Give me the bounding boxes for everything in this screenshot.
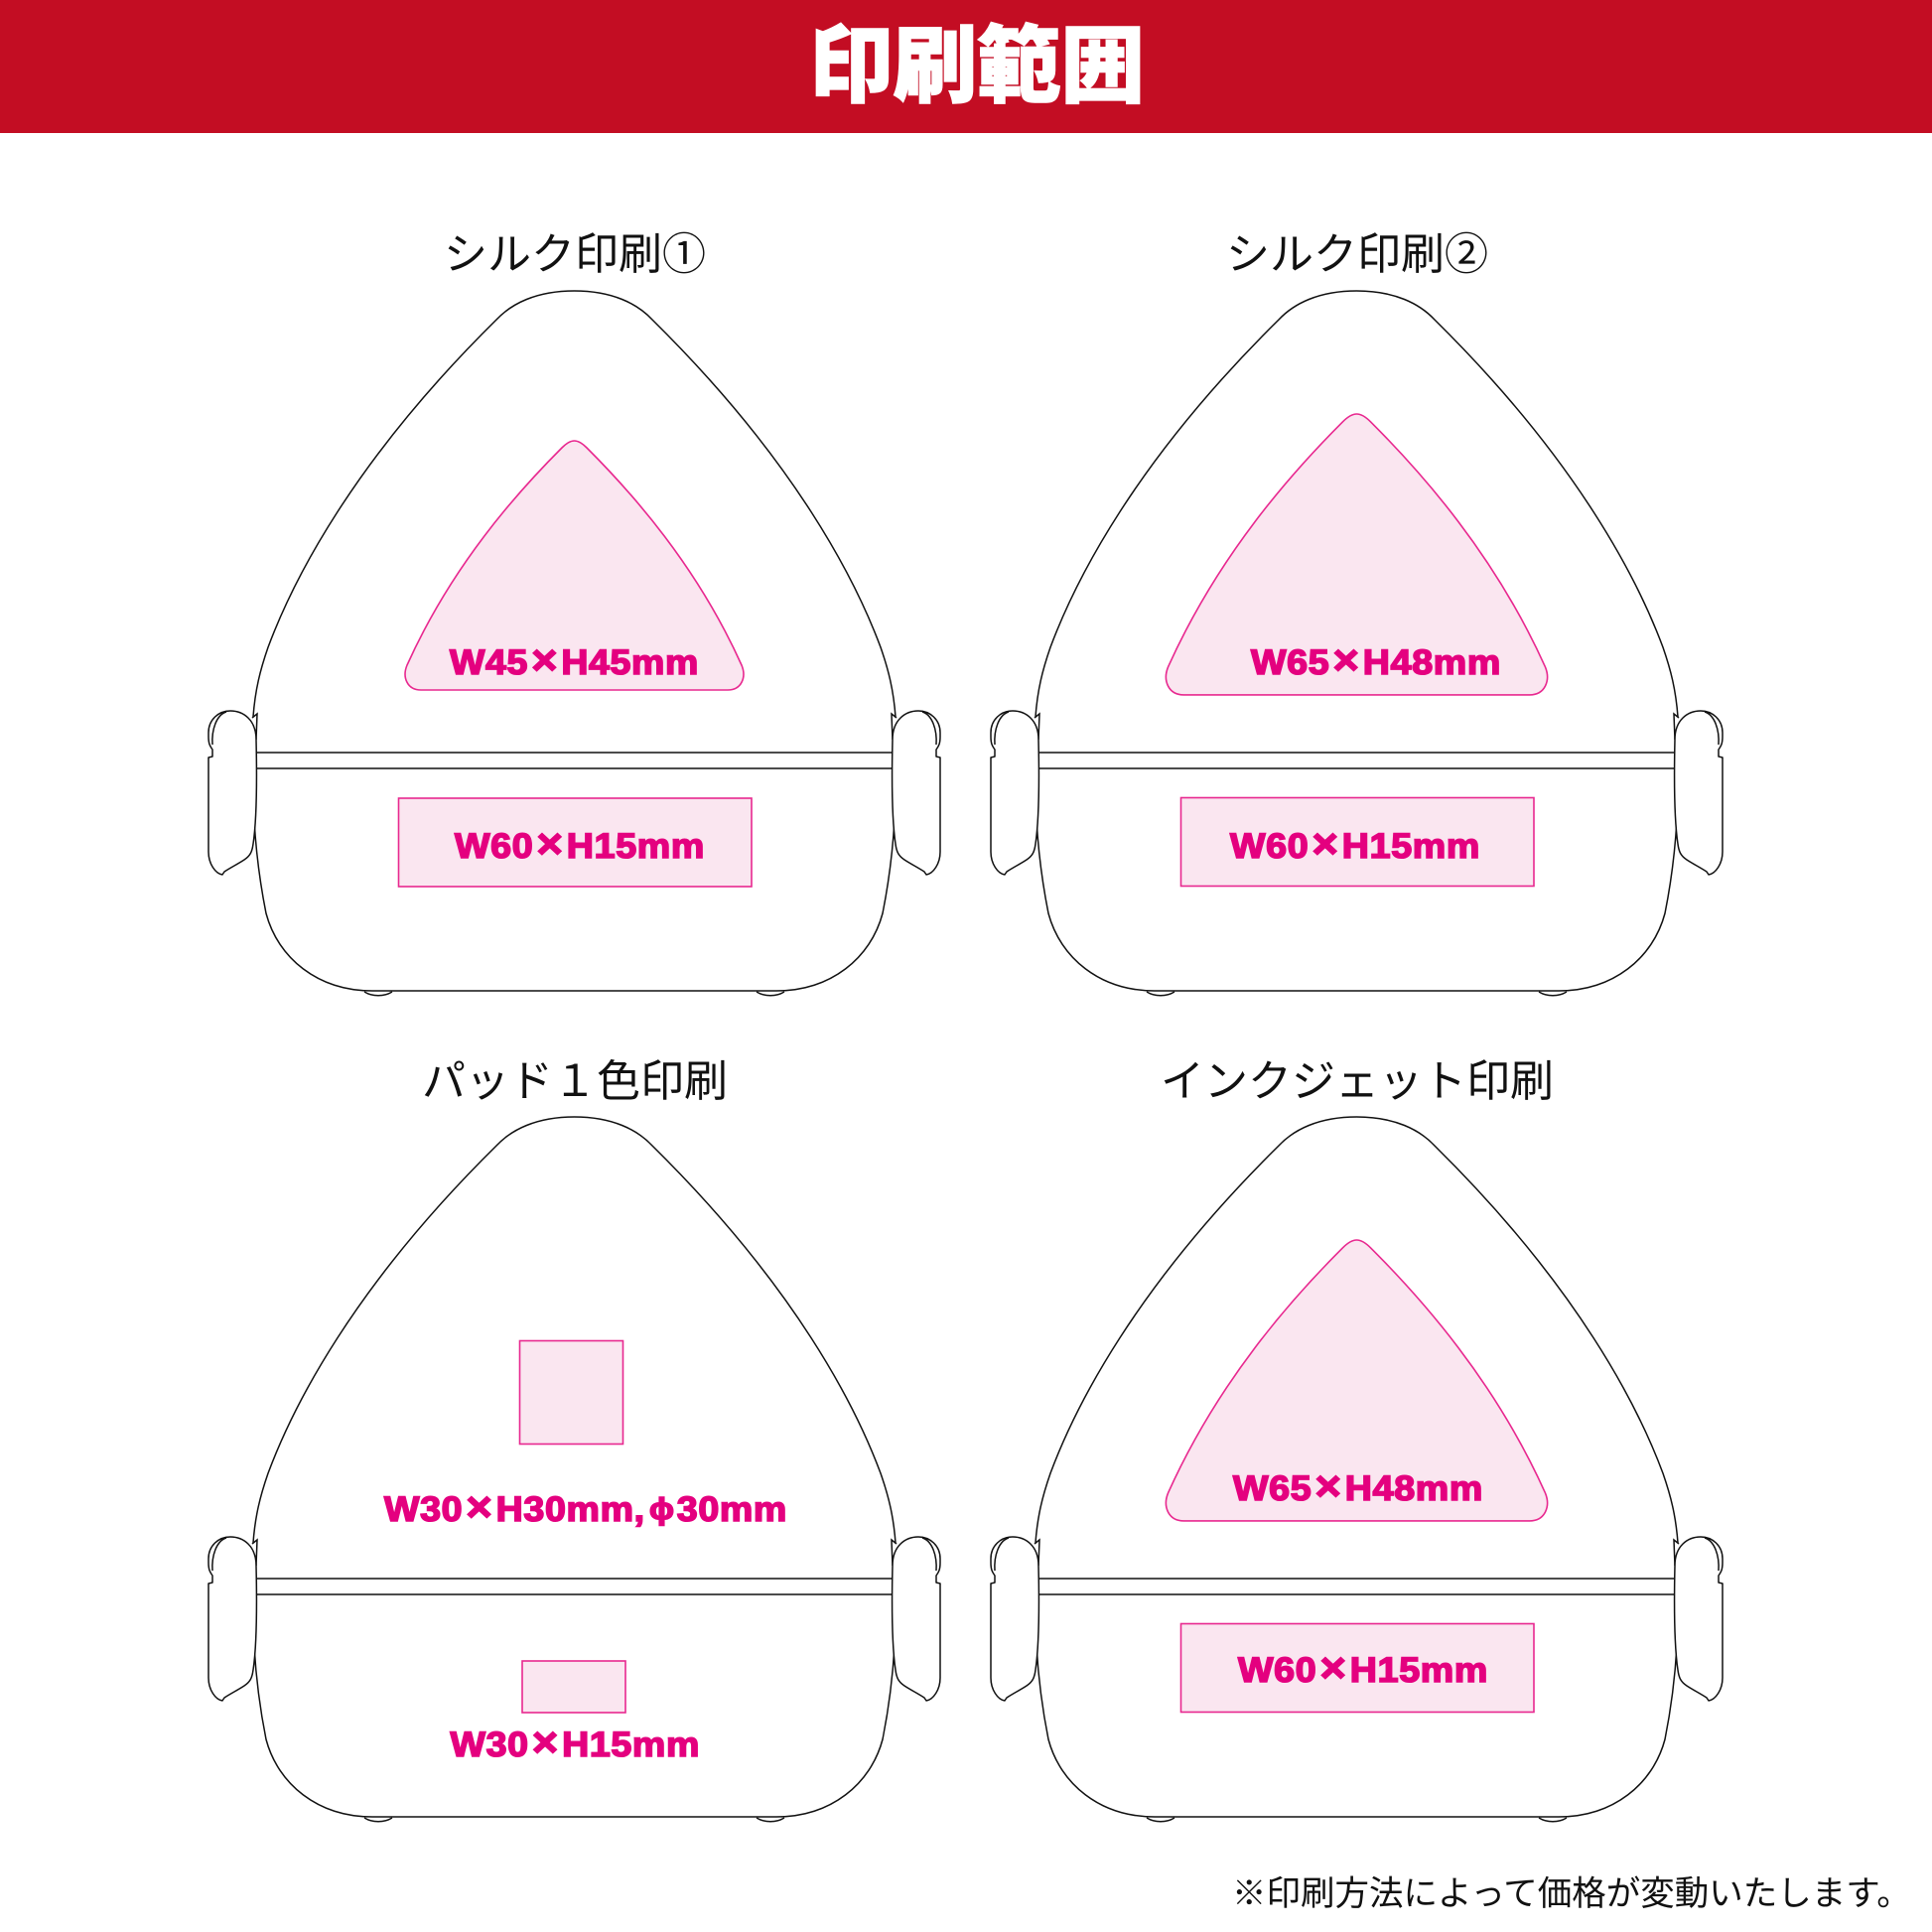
- panel: inkjet print: [991, 1057, 1723, 1822]
- dimension label: 30mm: [677, 1490, 787, 1529]
- dimension label: W65×H48mm: [1233, 1462, 1483, 1509]
- product outline: [208, 291, 940, 996]
- print area: triangle: [1166, 1240, 1548, 1521]
- print area: band rectangle: [1181, 798, 1534, 886]
- heading: pad print: パッド１色印刷: [422, 1057, 728, 1106]
- heading: inkjet print: インクジェット印刷: [1161, 1057, 1554, 1106]
- product outline: [991, 291, 1723, 996]
- panel: pad print 1 colour: [208, 1057, 940, 1822]
- product outline: [991, 1117, 1723, 1822]
- dimension label: W65×H48mm: [1251, 636, 1501, 683]
- print area: band rectangle: [1181, 1624, 1534, 1712]
- dimension label: ϕ: [649, 1491, 675, 1526]
- print area: triangle: [1166, 414, 1548, 695]
- print area: band rectangle: [522, 1661, 625, 1713]
- print area: triangle: [405, 441, 744, 690]
- print area: square: [520, 1340, 623, 1444]
- dimension label: W60×H15mm: [1238, 1644, 1488, 1691]
- dimension label: W30×H30mm,: [384, 1483, 634, 1530]
- panel: silk print 2: [991, 230, 1723, 996]
- heading: silk print 2: シルク印刷②: [1226, 230, 1488, 279]
- header band: [0, 0, 1932, 133]
- heading: silk print 1: シルク印刷①: [444, 230, 706, 279]
- footnote: ※印刷方法によって価格が変動いたします。: [1232, 1875, 1911, 1913]
- panel: silk print 1: [208, 230, 940, 996]
- dimension label: W45×H45mm: [450, 636, 699, 683]
- dimension label: W60×H15mm: [455, 820, 705, 867]
- dimension label: W30×H15mm: [451, 1719, 700, 1765]
- title: 印刷範囲: [809, 20, 1145, 113]
- dimension label: W60×H15mm: [1230, 820, 1480, 867]
- product outline: [208, 1117, 940, 1822]
- print area: band rectangle: [399, 798, 752, 887]
